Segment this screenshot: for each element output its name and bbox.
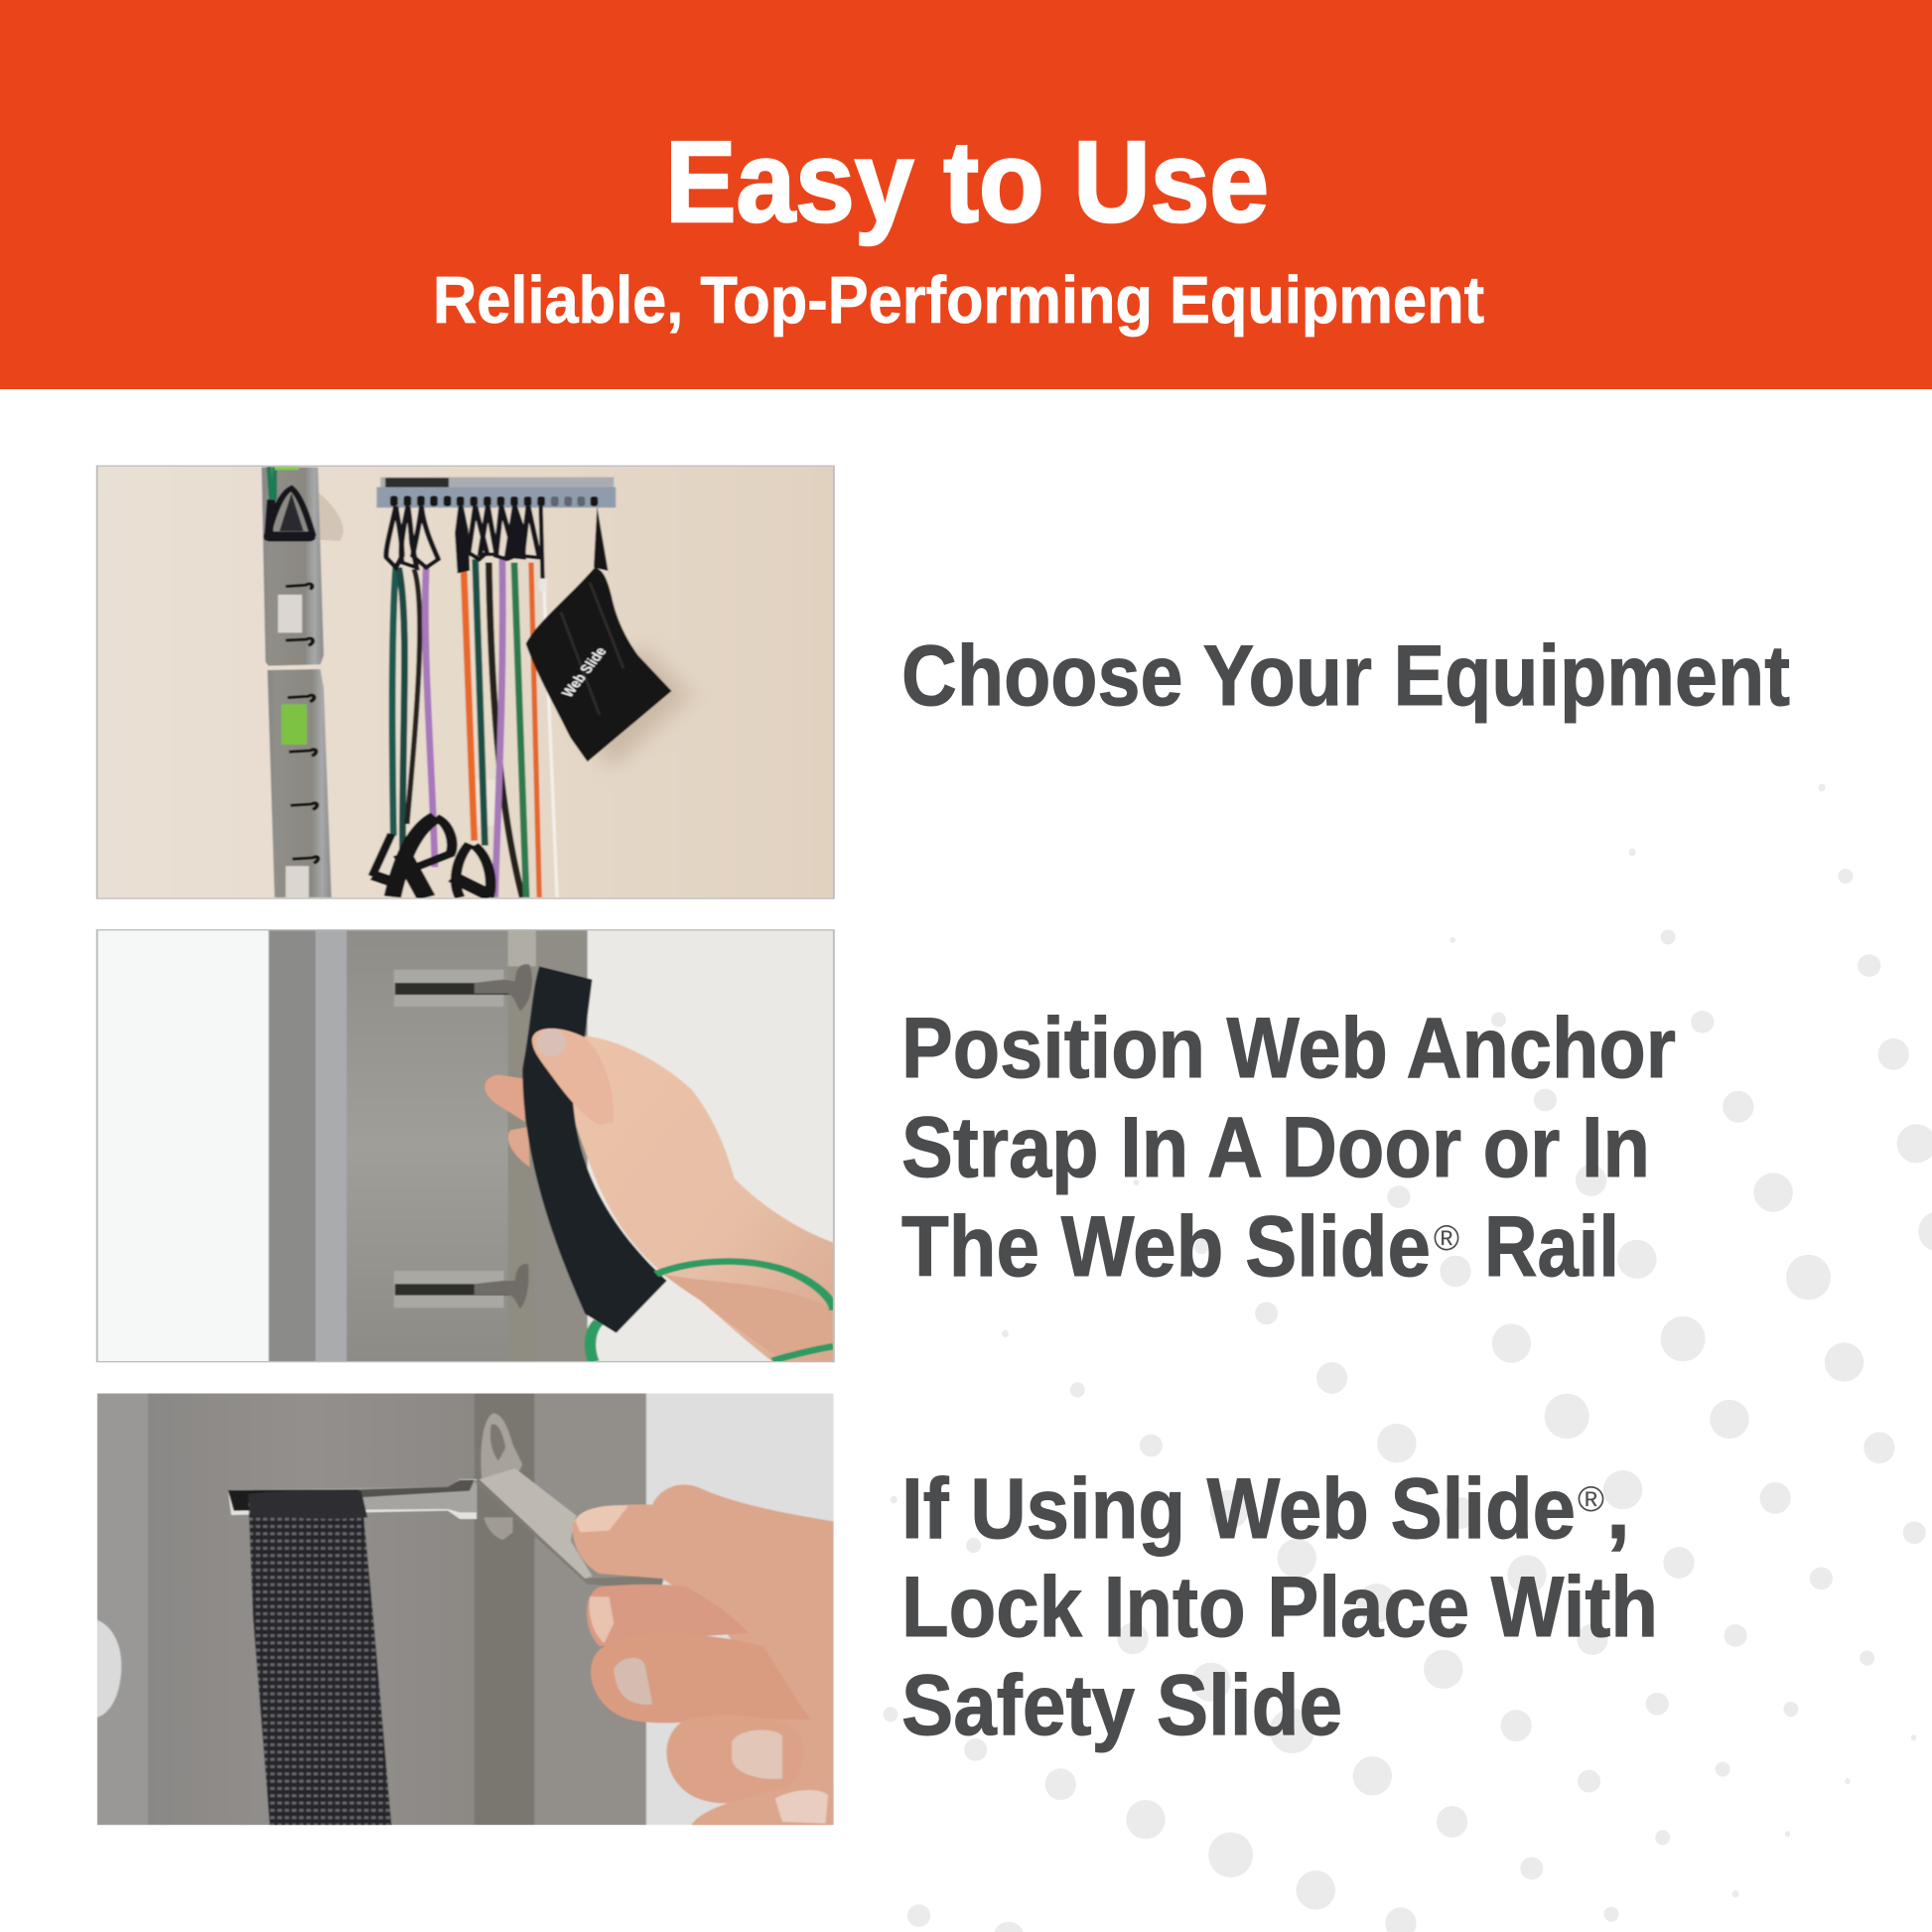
heading: lock with safety slide: Safety Slide: [901, 1658, 1342, 1753]
heading: lock with safety slide: ,: [1606, 1461, 1630, 1557]
heading: position web anchor: Strap In A Door or In: [901, 1100, 1650, 1195]
bag logo: Web Slide: [557, 645, 611, 699]
heading: position web anchor: [901, 1001, 1676, 1295]
heading: lock with safety slide: [901, 1461, 1658, 1753]
heading: lock with safety slide: If Using Web Slide: [901, 1461, 1576, 1557]
photo panel: positioning anchor strap: [97, 930, 834, 1362]
heading: position web anchor: The Web Slide: [901, 1199, 1431, 1295]
heading: position web anchor: Rail: [1484, 1199, 1619, 1295]
heading: lock with safety slide: Lock Into Place With: [901, 1560, 1658, 1655]
heading: lock with safety slide: ®: [1578, 1478, 1604, 1519]
decorative dot pattern: [884, 784, 1932, 1932]
title: Easy to Use: [665, 117, 1269, 246]
photo panel: equipment on wall: [97, 466, 834, 898]
photo panel: locking safety slide: [97, 1393, 834, 1826]
subtitle: Reliable, Top-Performing Equipment: [433, 263, 1484, 338]
heading: position web anchor: Position Web Anchor: [901, 1001, 1676, 1096]
heading: position web anchor: ®: [1434, 1217, 1459, 1258]
header banner: [0, 0, 1932, 389]
heading: choose your equipment: Choose Your Equipment: [901, 628, 1790, 724]
